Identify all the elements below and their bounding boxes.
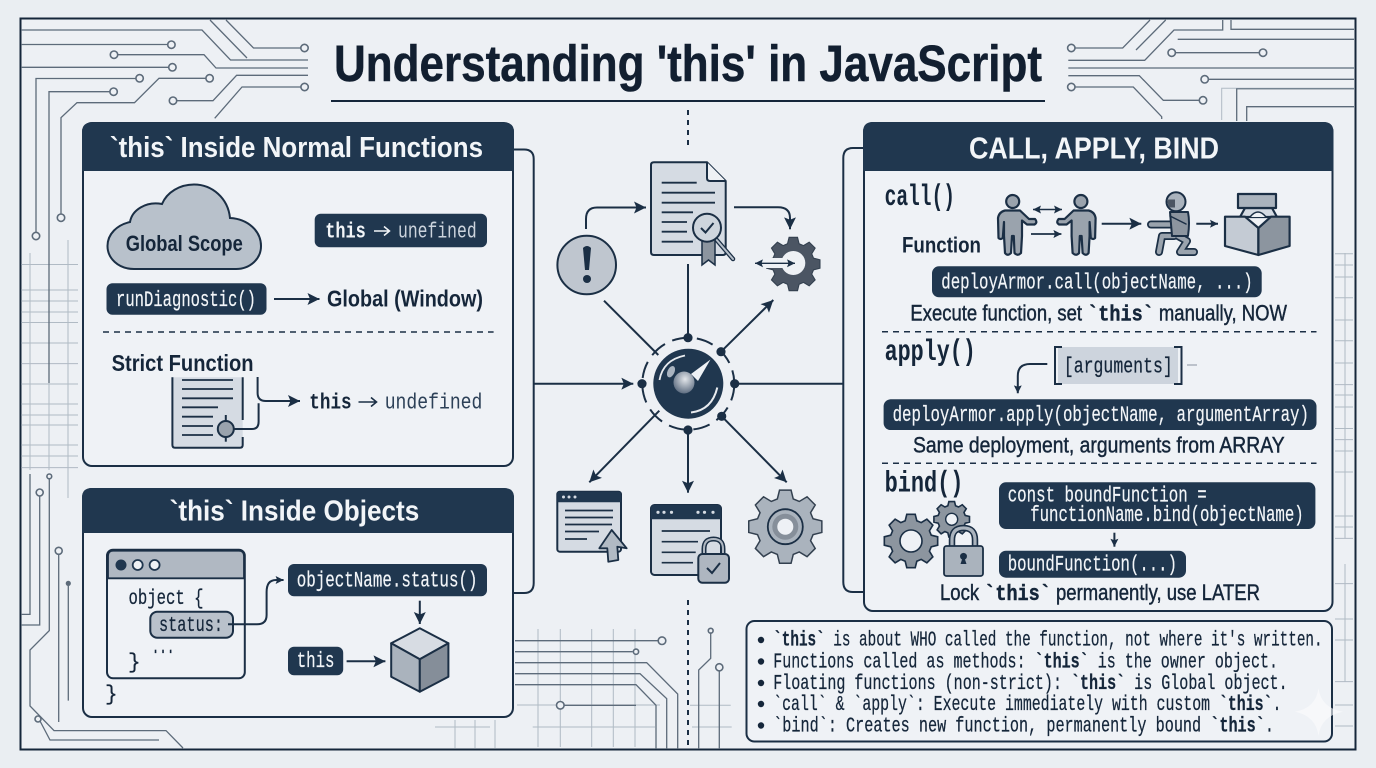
bullet dots xyxy=(758,637,764,729)
label: strict function: Strict Function xyxy=(112,350,254,376)
takeaway 5: `bind`: Creates new function, permanently bound `this`. xyxy=(773,716,1274,739)
arrow xyxy=(274,298,320,300)
label: function: Function xyxy=(902,233,981,258)
panel: key takeaways xyxy=(746,621,1332,742)
icon: strict document xyxy=(172,377,243,448)
label: call: call() xyxy=(885,181,955,215)
arrow: warning to document xyxy=(586,208,646,229)
result: this undefined: this xyxy=(309,390,352,416)
arrow: status to call xyxy=(228,580,284,624)
icon: cube xyxy=(391,628,448,692)
label: global window: Global (Window) xyxy=(327,286,483,312)
code pill: boundFunction call xyxy=(999,551,1186,578)
code pill: runDiagnostic xyxy=(106,283,266,315)
description: Lock `this` permanently, use LATER xyxy=(940,580,1260,607)
icon: person right xyxy=(1057,195,1096,255)
takeaway 3: Floating functions (non-strict): `this` is Global object. xyxy=(773,673,1288,696)
code pill: objectName.status xyxy=(288,564,487,596)
arrow: document to gear xyxy=(734,207,790,229)
panel: this inside normal functions xyxy=(82,122,514,466)
code pill: const boundFunction xyxy=(999,482,1315,529)
central hub diagram xyxy=(534,162,843,583)
panel: this inside objects xyxy=(82,488,514,717)
description: Same deployment, arguments from ARRAY xyxy=(913,433,1285,458)
icon: window with up arrow xyxy=(557,492,627,562)
closing brace: } xyxy=(105,684,118,707)
icon: person left xyxy=(998,195,1036,255)
code pill: this undefined xyxy=(315,214,487,247)
array box: arguments: [arguments] xyxy=(1064,355,1173,380)
icon: global scope cloud: Global Scope xyxy=(126,231,243,256)
icon: dark gear with arrows xyxy=(755,237,820,291)
icon: sparkle watermark xyxy=(1295,688,1343,736)
arrow xyxy=(1113,533,1115,547)
code pill: this: this xyxy=(297,649,334,674)
heading: CALL, APPLY, BIND xyxy=(969,130,1219,166)
icon: document with badge xyxy=(651,162,733,265)
icon: open book xyxy=(1225,194,1290,255)
code window xyxy=(107,550,245,678)
title: Understanding 'this' in JavaScript xyxy=(334,35,1042,92)
connector brackets to the hub xyxy=(513,148,864,593)
arrow: to lower-centre window xyxy=(687,430,689,493)
code pill: this undefined: this xyxy=(325,219,366,244)
icon: central gauge xyxy=(637,333,739,435)
arrow xyxy=(1196,223,1218,225)
section: bind xyxy=(884,468,1315,607)
code pill: deployArmor.call: deployArmor.call(objectName, ...) xyxy=(941,270,1253,295)
panel header xyxy=(82,488,514,533)
code pill: runDiagnostic: runDiagnostic() xyxy=(116,288,256,313)
code pill: this xyxy=(288,647,343,675)
result: this undefined: undefined xyxy=(385,390,482,416)
description: Execute function, set `this` manually, NOW xyxy=(910,301,1287,328)
array box: arguments xyxy=(1055,347,1182,384)
takeaway 2: Functions called as methods: `this` is the owner object. xyxy=(773,651,1278,674)
icon: gears and lock xyxy=(884,502,983,576)
heading: `this` Inside Normal Functions xyxy=(110,132,483,164)
panel header xyxy=(82,122,514,171)
result: this undefined xyxy=(309,390,482,416)
arrow: to lower-left window xyxy=(589,411,659,482)
icon: window with lock xyxy=(651,505,729,583)
arrow: to lower-right gear xyxy=(722,416,787,482)
arrow xyxy=(1102,223,1141,225)
code window: ... xyxy=(152,637,174,660)
takeaway 4: `call` & `apply`: Execute immediately with custom `this`. xyxy=(773,694,1281,717)
section: call xyxy=(885,181,1290,328)
arrow: to top-right gear xyxy=(721,300,773,352)
arrow: arguments to call xyxy=(1018,364,1047,393)
heading: `this` Inside Objects xyxy=(170,496,419,528)
code window: status: xyxy=(159,615,223,638)
code pill: boundFunction call: boundFunction(...) xyxy=(1008,553,1177,578)
panel header xyxy=(863,122,1334,171)
code window: } xyxy=(128,652,141,675)
arrow xyxy=(419,601,421,624)
code window: object { xyxy=(128,588,204,611)
icon: light gear xyxy=(749,490,822,563)
arrow xyxy=(347,660,385,662)
icon: warning circle xyxy=(557,236,616,294)
arrow: strict function to result xyxy=(233,377,300,429)
panel: call apply bind xyxy=(863,122,1334,611)
label: bind: bind() xyxy=(885,468,963,502)
arrow xyxy=(1031,233,1061,235)
arrow: exchange xyxy=(1033,208,1062,210)
arrow: left panel to hub xyxy=(534,383,633,385)
code pill: this undefined: unefined xyxy=(398,219,477,244)
code pill: deployArmor.call xyxy=(932,266,1262,297)
code pill: objectName.status: objectName.status() xyxy=(297,569,478,594)
label: apply: apply() xyxy=(885,336,976,370)
icon: kneeling armoured figure xyxy=(1151,192,1194,252)
icon: global scope cloud xyxy=(108,184,261,269)
code pill: const boundFunction: const boundFunction = xyxy=(1008,484,1207,509)
section: apply xyxy=(884,336,1316,458)
